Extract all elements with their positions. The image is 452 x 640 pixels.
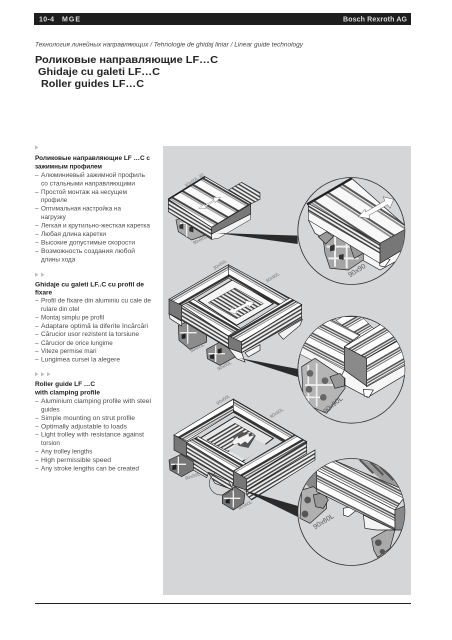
- marker: two triangles: [35, 273, 44, 277]
- detail circle: single carriage: [298, 177, 408, 284]
- text block: English: –: [35, 398, 39, 405]
- connector: wide rail detail: [243, 490, 298, 517]
- text block: English: Simple mounting on strut profile: [41, 415, 136, 422]
- small detail ring: [209, 472, 233, 495]
- illustration: single carriage: [168, 172, 298, 246]
- gray end face: [212, 204, 251, 234]
- gray end faces: [174, 435, 187, 457]
- text block: English: torsion: [41, 440, 60, 447]
- text block: Russian: длины хода: [41, 256, 76, 264]
- panel: illustrations background: [163, 146, 411, 595]
- text block: Russian: [35, 146, 151, 264]
- text block: Romanian: Viteze permise mari: [41, 348, 97, 355]
- back rail: [228, 182, 260, 204]
- carriage side: [168, 199, 212, 239]
- text block: Romanian: –: [35, 298, 39, 305]
- text block: Romanian: –: [35, 331, 39, 338]
- text block: Russian: Высокие допустимые скорости: [41, 240, 135, 246]
- detail circle: single carriage: 90x90: [347, 263, 367, 279]
- text block: Romanian: rulare din otel: [41, 306, 79, 313]
- strut profiles: [178, 321, 235, 365]
- text block: English: High permissible speed: [41, 457, 112, 464]
- text block: Romanian: Montaj simplu pe profil: [41, 314, 104, 322]
- illustration: frame carriage with wide rail: 90x60L: [269, 407, 285, 419]
- frame sides: [182, 305, 228, 348]
- text block: Russian: Любая длина каретки: [41, 230, 106, 238]
- text block: Romanian: –: [35, 314, 39, 322]
- inner opening: [200, 417, 273, 463]
- text block: Romanian: Ghidaje cu galeti LF..C cu profil de: [35, 282, 144, 288]
- text block: Russian: со стальными направляющими: [41, 180, 135, 188]
- text block: Russian: нагрузку: [41, 214, 67, 221]
- text block: English: Any trolley lengths: [41, 448, 92, 456]
- footer rule: [35, 603, 411, 604]
- illustration: frame carriage on two rails: 90x60L: [216, 360, 233, 372]
- size labels: 90x60L: [215, 393, 231, 406]
- text block: Russian: Возможность создания любой: [41, 247, 136, 255]
- text block: English: Any stroke lengths can be created: [41, 466, 140, 472]
- text block: Russian: Простой монтаж на несущем: [41, 188, 127, 196]
- text block: Russian: –: [35, 231, 39, 238]
- text block: English: –: [35, 432, 39, 438]
- illustration: frame carriage on two rails: [169, 258, 302, 372]
- text block: Romanian: –: [35, 348, 39, 355]
- back bars: [169, 265, 228, 306]
- text block: Russian: Алюминиевый зажимной профиль: [41, 171, 146, 179]
- breadcrumb subtitle: Технология линейных направляющих / Tehnologie de ghidaj liniar / Linear guide technology: [35, 42, 304, 49]
- text block: English: –: [35, 415, 39, 422]
- motion arrow: [199, 197, 221, 209]
- carriage top: [168, 177, 251, 227]
- text block: Romanian: Adaptare optimă la diferite încărcări: [41, 323, 148, 330]
- illustration: single carriage: 90x90L: [192, 234, 208, 246]
- size labels: 30x60L 30: [184, 172, 205, 188]
- text block: English: –: [35, 466, 39, 472]
- text block: Romanian: Cărucior usor rezistent la torsiune: [41, 331, 140, 338]
- illustration: frame carriage with wide rail: [169, 393, 315, 511]
- text block: Russian: зажимным профилем: [35, 164, 102, 170]
- detail circle: wide rail: [298, 458, 408, 565]
- illustration: frame carriage with wide rail: 90x60L: [237, 499, 253, 511]
- header bar: MGE: [62, 16, 80, 23]
- front bars: [182, 299, 241, 336]
- text block: English: Aluminium clamping profile with steel: [41, 398, 151, 405]
- text block: Romanian: Profil de fixare din aluminiu cu cale de: [41, 298, 152, 305]
- zoom connector: [217, 233, 298, 244]
- text block: English: Roller guide LF …C: [35, 381, 95, 388]
- gray end faces: [169, 299, 182, 320]
- title: Ghidaje cu galeti LF…C: [38, 67, 160, 78]
- frame sides: [187, 442, 233, 483]
- title: [35, 55, 218, 90]
- text block: English: –: [35, 448, 39, 456]
- text block: Romanian: Cărucior de orice lungime: [41, 340, 113, 347]
- marker: one triangle: [35, 146, 38, 150]
- text block: Romanian: –: [35, 356, 39, 364]
- text block: Russian: –: [35, 172, 39, 179]
- text block: Romanian: fixare: [35, 290, 52, 296]
- text block: Russian: –: [35, 222, 39, 230]
- text block: Russian: –: [35, 189, 39, 196]
- illustration: frame carriage on two rails: 90x60L: [265, 271, 281, 284]
- strut profile: [176, 214, 205, 240]
- text block: English: –: [35, 457, 39, 464]
- detail circle: frame carriage: [295, 316, 408, 423]
- inner opening: [198, 279, 273, 325]
- text block: Russian: –: [35, 240, 39, 246]
- text block: English: [34, 372, 151, 472]
- motion arrow: [228, 300, 254, 314]
- detail circle: wide rail: 90x60L: [312, 513, 336, 531]
- header bar: [34, 13, 411, 25]
- size labels: 30x60L: [212, 258, 228, 271]
- text block: Romanian: –: [35, 323, 39, 330]
- text block: Russian: Оптимальная настройка на: [41, 204, 121, 212]
- text block: Russian: Роликовые направляющие LF …C с: [35, 155, 150, 162]
- text block: English: with clamping profile: [34, 390, 100, 397]
- illustration: frame carriage on two rails: 90x60L: [189, 342, 205, 354]
- detail circle: frame carriage: 90x90L: [322, 395, 345, 416]
- title: Roller guides LF…C: [41, 79, 144, 90]
- text block: Russian: –: [35, 248, 39, 255]
- illustration: frame carriage with wide rail: 90x60L: [184, 471, 201, 481]
- carriage hump and arrow: [233, 432, 256, 448]
- header bar: 10-4: [39, 16, 54, 23]
- text block: English: Optimally adjustable to loads: [41, 424, 127, 430]
- marker: three triangles: [35, 372, 50, 376]
- connector: frame carriage detail: [239, 358, 298, 377]
- text block: English: Light trolley with resistance against: [41, 432, 144, 438]
- text block: Russian: –: [35, 206, 39, 212]
- text block: Romanian: –: [35, 340, 39, 347]
- lower rail: [247, 450, 315, 500]
- rails below frame: [169, 314, 182, 326]
- back bars: [174, 399, 233, 441]
- text block: Russian: профиле: [41, 197, 68, 204]
- text block: English: –: [35, 424, 39, 430]
- text block: English: guides: [41, 406, 60, 414]
- header bar: Bosch Rexroth AG: [343, 16, 408, 23]
- text block: Romanian: [35, 273, 152, 364]
- title: Роликовые направляющие LF…C: [35, 55, 218, 66]
- text block: Romanian: Lungimea cursei la alegere: [41, 356, 121, 364]
- text block: Russian: Легкая и крутильно-жесткая каретка: [41, 222, 151, 230]
- strut profiles: [169, 454, 245, 510]
- front bars: [187, 437, 246, 471]
